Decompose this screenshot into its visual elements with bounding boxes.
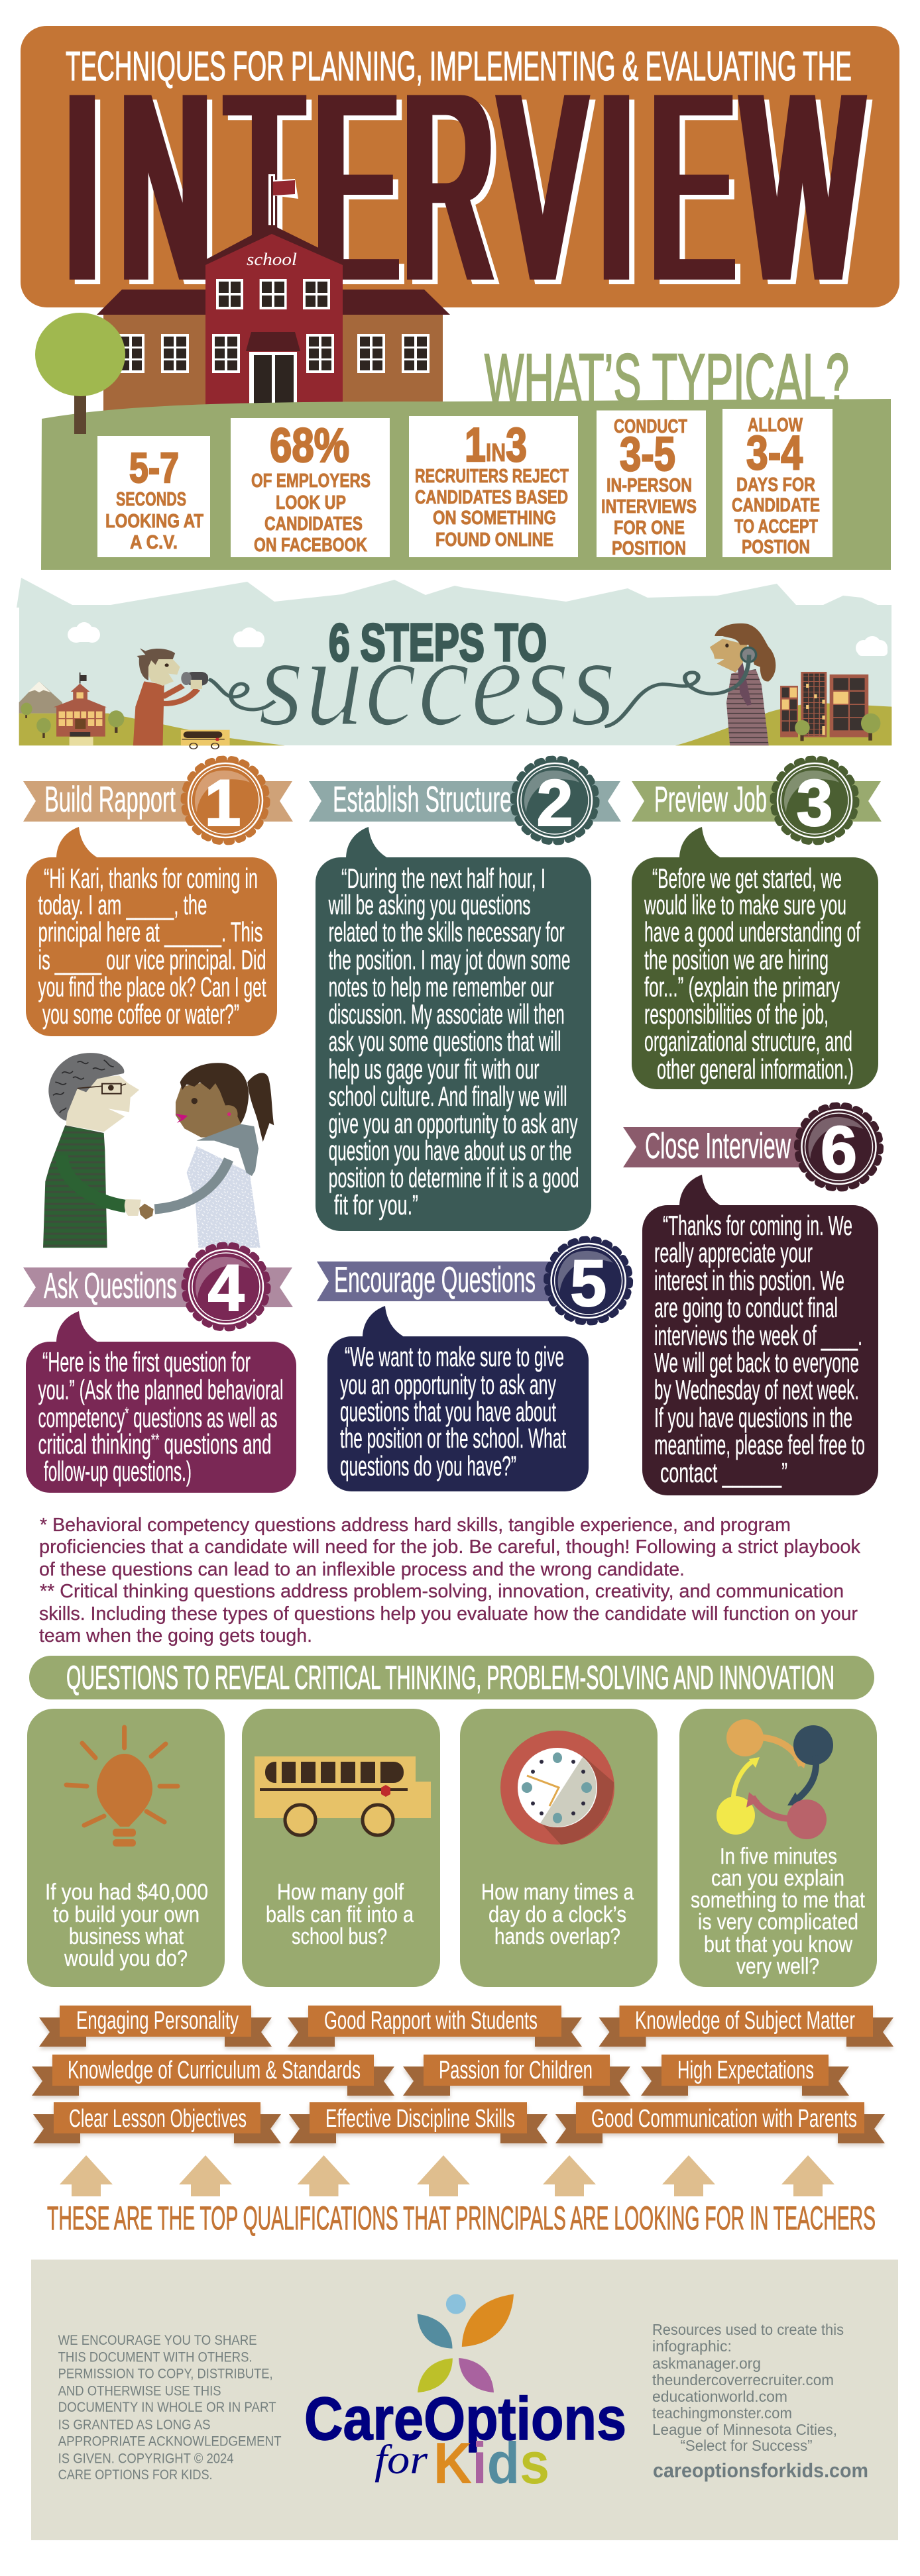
speech bubble: is _____ our vice principal. Did (38, 944, 266, 975)
ribbon (23, 781, 293, 822)
stat: in-person interviews: 3-5 (620, 428, 675, 481)
question text: can you explain (711, 1866, 844, 1891)
question text (266, 1880, 414, 1949)
ribbon (23, 1267, 293, 1307)
stat: seconds looking: 5-7 (129, 444, 179, 492)
stat: in-person interviews: POSITION (612, 538, 686, 559)
ribbon title: Establish Structure (333, 778, 512, 820)
badge number 3 (774, 759, 856, 841)
speech bubble: question you have about us or the (329, 1135, 572, 1166)
badge number 1 (184, 759, 266, 841)
speech bubble: ask you some questions that will (329, 1026, 561, 1057)
step 5: encourage questions (317, 1240, 630, 1491)
question text: school bus? (292, 1924, 387, 1949)
stat: seconds looking: LOOKING AT (105, 511, 203, 532)
question text: but that you know (704, 1932, 852, 1957)
ribbon: high expectations: High Expectations (677, 2057, 814, 2084)
speech bubble: help us gage your fit with our (329, 1053, 540, 1085)
permission text: PERMISSION TO COPY, DISTRIBUTE, (58, 2365, 273, 2381)
icon: school bus (255, 1756, 431, 1835)
question text: to build your own (53, 1902, 200, 1927)
header background (21, 26, 899, 307)
ribbon (623, 1127, 848, 1167)
stat: in-person interviews: CONDUCT (614, 416, 687, 437)
card: explain question (679, 1709, 877, 1987)
speech bubble (642, 1175, 878, 1495)
badge number 3: 3 (796, 766, 833, 839)
heading: 6 steps to: 6 STEPS TO (329, 613, 547, 672)
panel: green hill (41, 399, 891, 570)
question text: is very complicated (698, 1909, 858, 1935)
card: school bus question (242, 1709, 440, 1987)
question text: business what (69, 1924, 184, 1949)
panel: stat cards (97, 409, 833, 559)
icon: tree (35, 313, 125, 434)
stat: employers on facebook: 68% (270, 419, 349, 472)
speech bubble: the position. I may jot down some (329, 944, 571, 975)
badge number 5 (547, 1240, 630, 1322)
question text: balls can fit into a (266, 1902, 414, 1927)
question text: How many times a (481, 1880, 634, 1905)
speech bubble: competency (38, 1402, 188, 1433)
ribbon: passion for children: Passion for Children (439, 2057, 593, 2084)
speech bubble: position to determine if it is a good (329, 1162, 579, 1193)
stat: in-person interviews: FOR ONE (614, 517, 685, 539)
logo: care options for kids: for (374, 2438, 428, 2483)
speech bubble: “Here is the first question for (42, 1346, 251, 1377)
question text: very well? (736, 1954, 819, 1979)
permission text (58, 2332, 282, 2483)
permission text: CARE OPTIONS FOR KIDS. (58, 2467, 213, 2483)
speech bubble: “Hi Kari, thanks for coming in (44, 863, 258, 894)
resources text: infographic: (652, 2337, 732, 2355)
step 6: close interview (623, 1106, 880, 1495)
stat: employers on facebook (231, 418, 390, 557)
icon: light bulb (66, 1727, 178, 1847)
stat: days to accept: DAYS FOR (736, 474, 815, 496)
badge number 4 (185, 1246, 267, 1328)
stat: in-person interviews: INTERVIEWS (601, 496, 697, 517)
stat: recruiters reject: RECRUITERS REJECT (415, 466, 569, 487)
footnotes text: proficiencies that a candidate will need for the job. Be careful, though! Following a strict playbook (39, 1536, 861, 1558)
permission text: IS GIVEN. COPYRIGHT © 2024 (58, 2450, 234, 2466)
speech bubble: questions and (159, 1428, 272, 1460)
clouds (68, 622, 888, 656)
speech bubble (26, 827, 277, 1036)
illustration: handshake (43, 1053, 274, 1248)
stat: days to accept: TO ACCEPT (734, 516, 818, 537)
icon: school building: school (247, 250, 297, 269)
resources text: askmanager.org (652, 2355, 761, 2372)
stat: seconds looking (97, 436, 210, 557)
step 4: ask questions (23, 1246, 296, 1493)
ribbon: clear lesson objectives: Clear Lesson Objectives (69, 2105, 247, 2133)
ribbon: good rapport (288, 2006, 582, 2047)
step 1: build rapport (23, 759, 293, 1036)
speech bubble: principal here at ______. This (38, 916, 262, 947)
stat: in-person interviews (597, 411, 706, 559)
resources text: “Select for Success” (680, 2437, 813, 2454)
speech bubble: “We want to make sure to give (345, 1341, 564, 1372)
ribbon: passion for children (403, 2055, 630, 2096)
speech bubble: will be asking you questions (328, 889, 531, 920)
permission text: THIS DOCUMENT WITH OTHERS. (58, 2349, 253, 2365)
ribbon: high expectations (641, 2055, 849, 2096)
stat: seconds looking: SECONDS (116, 489, 186, 510)
stat: days to accept (722, 409, 833, 558)
ribbon title: Encourage Questions (334, 1259, 536, 1300)
stat: recruiters reject (409, 416, 578, 557)
ribbons: top qualifications (32, 2006, 893, 2143)
question text: In five minutes (720, 1844, 837, 1869)
badge number 2 (514, 759, 596, 841)
arrows: pointing up (60, 2155, 834, 2196)
logo: care options for kids: Kids (433, 2430, 549, 2496)
speech bubble (327, 1306, 589, 1491)
footnotes text: of these questions can lead to an inflexible process and the wrong candidate. (39, 1559, 685, 1580)
question text: If you had $40,000 (45, 1880, 208, 1905)
speech bubble: really appreciate your (654, 1237, 813, 1268)
resources text (652, 2321, 844, 2454)
resources text: League of Minnesota Cities, (652, 2421, 837, 2438)
speech bubble (316, 827, 591, 1231)
stat: recruiters reject: CANDIDATES BASED (415, 487, 568, 508)
speech bubble: contact ______” (660, 1457, 787, 1488)
speech bubble: “During the next half hour, I (341, 863, 546, 894)
ribbon: clear lesson objectives (33, 2102, 281, 2143)
panel: six steps banner (17, 578, 891, 752)
stat: employers on facebook: CANDIDATES (264, 513, 363, 535)
stat: recruiters reject: ON SOMETHING (433, 508, 556, 529)
question text (481, 1880, 634, 1949)
speech bubble: discussion. My associate will then (329, 998, 565, 1030)
ribbon: knowledge of subject (599, 2006, 893, 2047)
badge number 5: 5 (570, 1246, 606, 1320)
resources text: Resources used to create this (652, 2321, 844, 2338)
heading: interview: INTERVIEW (65, 37, 862, 337)
ribbon: effective discipline (289, 2102, 547, 2143)
speech bubble: you an opportunity to ask any (340, 1369, 556, 1400)
question text: day do a clock’s (489, 1902, 626, 1927)
speech bubble (26, 1311, 296, 1493)
question text: hands overlap? (494, 1924, 620, 1949)
stat: days to accept: CANDIDATE (732, 495, 820, 516)
ribbon title: Preview Job (654, 778, 767, 820)
footnotes text: team when the going gets tough. (39, 1625, 312, 1646)
website: careoptionsforkids.com (653, 2459, 868, 2482)
footnotes text: skills. Including these types of questions help you evaluate how the candidate will function on your (39, 1603, 858, 1625)
heading: success script: success (258, 613, 616, 752)
stat: days to accept: 3-4 (746, 427, 803, 480)
card: light bulb question (27, 1709, 225, 1987)
ribbon: good communication (555, 2102, 885, 2143)
ribbon title: Ask Questions (44, 1265, 177, 1306)
question text: something to me that (691, 1888, 865, 1913)
speech bubble: * (125, 1403, 129, 1423)
speech bubble: the position or the school. What (340, 1422, 566, 1454)
man (43, 1053, 141, 1248)
permission text: IS GRANTED AS LONG AS (58, 2417, 211, 2433)
stat: seconds looking: A C.V. (130, 532, 178, 553)
stat: days to accept: ALLOW (748, 415, 803, 436)
speech bubble: questions do you have?” (340, 1450, 516, 1481)
ribbon (632, 781, 882, 822)
speech bubble: related to the skills necessary for (329, 916, 565, 947)
scene: left landscape with caller (19, 648, 285, 749)
icon: school building (97, 174, 450, 414)
speech bubble: critical thinking (38, 1428, 221, 1460)
ribbon: engaging personality (39, 2006, 272, 2047)
speech bubble: you some coffee or water?” (42, 998, 239, 1030)
step 3: preview job (632, 759, 882, 1089)
stat: days to accept: POSTION (742, 537, 810, 558)
stat: employers on facebook: LOOK UP (276, 492, 346, 513)
stat: in-person interviews: IN-PERSON (606, 475, 692, 496)
ribbon: effective discipline: Effective Discipline Skills (325, 2105, 515, 2133)
question text (691, 1844, 865, 1979)
stat: recruiters reject: 1IN3 (465, 419, 527, 472)
icon: clock (500, 1731, 614, 1845)
speech bubble (632, 827, 878, 1089)
speech bubble: today. I am _____, the (38, 889, 207, 920)
footnotes text: ** Critical thinking questions address problem-solving, innovation, creativity, and communication (40, 1581, 844, 1602)
icon: cycle arrows (717, 1719, 833, 1839)
speech bubble: you find the place ok? Can I get (38, 971, 266, 1002)
scene: right city with listener (605, 623, 891, 745)
question text (45, 1880, 208, 1971)
resources text: theundercoverrecruiter.com (652, 2371, 834, 2388)
badge number 4: 4 (207, 1251, 245, 1324)
ribbon (317, 1261, 597, 1301)
permission text: DOCUMENTY IN WHOLE OR IN PART (58, 2399, 276, 2415)
question text: How many golf (277, 1880, 404, 1905)
speech bubble: questions that you have about (340, 1396, 556, 1427)
logo: care options for kids (304, 2294, 626, 2496)
card: clock question (460, 1709, 658, 1987)
resources text: teachingmonster.com (652, 2404, 792, 2422)
question text: would you do? (64, 1946, 188, 1971)
speech bubble: give you an opportunity to ask any (329, 1108, 578, 1139)
ribbon: knowledge of curriculum: Knowledge of Curriculum & Standards (68, 2057, 361, 2084)
speech bubble: notes to help me remember our (329, 971, 554, 1002)
speech bubble: ** (151, 1430, 159, 1450)
speech bubble: fit for you.” (334, 1189, 418, 1220)
woman (139, 1063, 274, 1248)
permission text: AND OTHERWISE USE THIS (58, 2383, 221, 2398)
speech bubble: follow-up questions.) (44, 1456, 192, 1487)
speech bubble: questions as well as (129, 1402, 277, 1433)
ribbon title: Close Interview (645, 1125, 791, 1166)
stat: employers on facebook: ON FACEBOOK (254, 535, 367, 556)
permission text: APPROPRIATE ACKNOWLEDGEMENT (58, 2433, 282, 2449)
ribbon: engaging personality: Engaging Personality (76, 2007, 239, 2035)
speech bubble: you.” (Ask the planned behavioral (38, 1374, 284, 1405)
panel: footer (31, 2259, 898, 2540)
ribbon: knowledge of curriculum (32, 2055, 394, 2096)
logo: care options for kids: CareOptions (304, 2385, 626, 2453)
resources text: educationworld.com (652, 2388, 787, 2405)
footnotes text (39, 1515, 861, 1646)
ribbon: good rapport: Good Rapport with Students (324, 2007, 538, 2035)
stat: recruiters reject: FOUND ONLINE (435, 529, 553, 551)
ribbon title: Build Rapport (44, 778, 176, 820)
permission text: WE ENCOURAGE YOU TO SHARE (58, 2332, 257, 2348)
badge number 2: 2 (536, 766, 573, 839)
footnotes text: * Behavioral competency questions address hard skills, tangible experience, and program (40, 1515, 791, 1536)
stat: employers on facebook: OF EMPLOYERS (251, 470, 371, 492)
badge number 6: 6 (821, 1112, 857, 1186)
step 2: establish structure (309, 759, 621, 1231)
panel: title header (21, 26, 899, 337)
badge number 1: 1 (204, 766, 241, 839)
badge number 6 (798, 1106, 880, 1188)
banner sky (17, 578, 891, 745)
ribbon (309, 781, 621, 822)
speech bubble: school culture. And finally we will (329, 1081, 567, 1112)
